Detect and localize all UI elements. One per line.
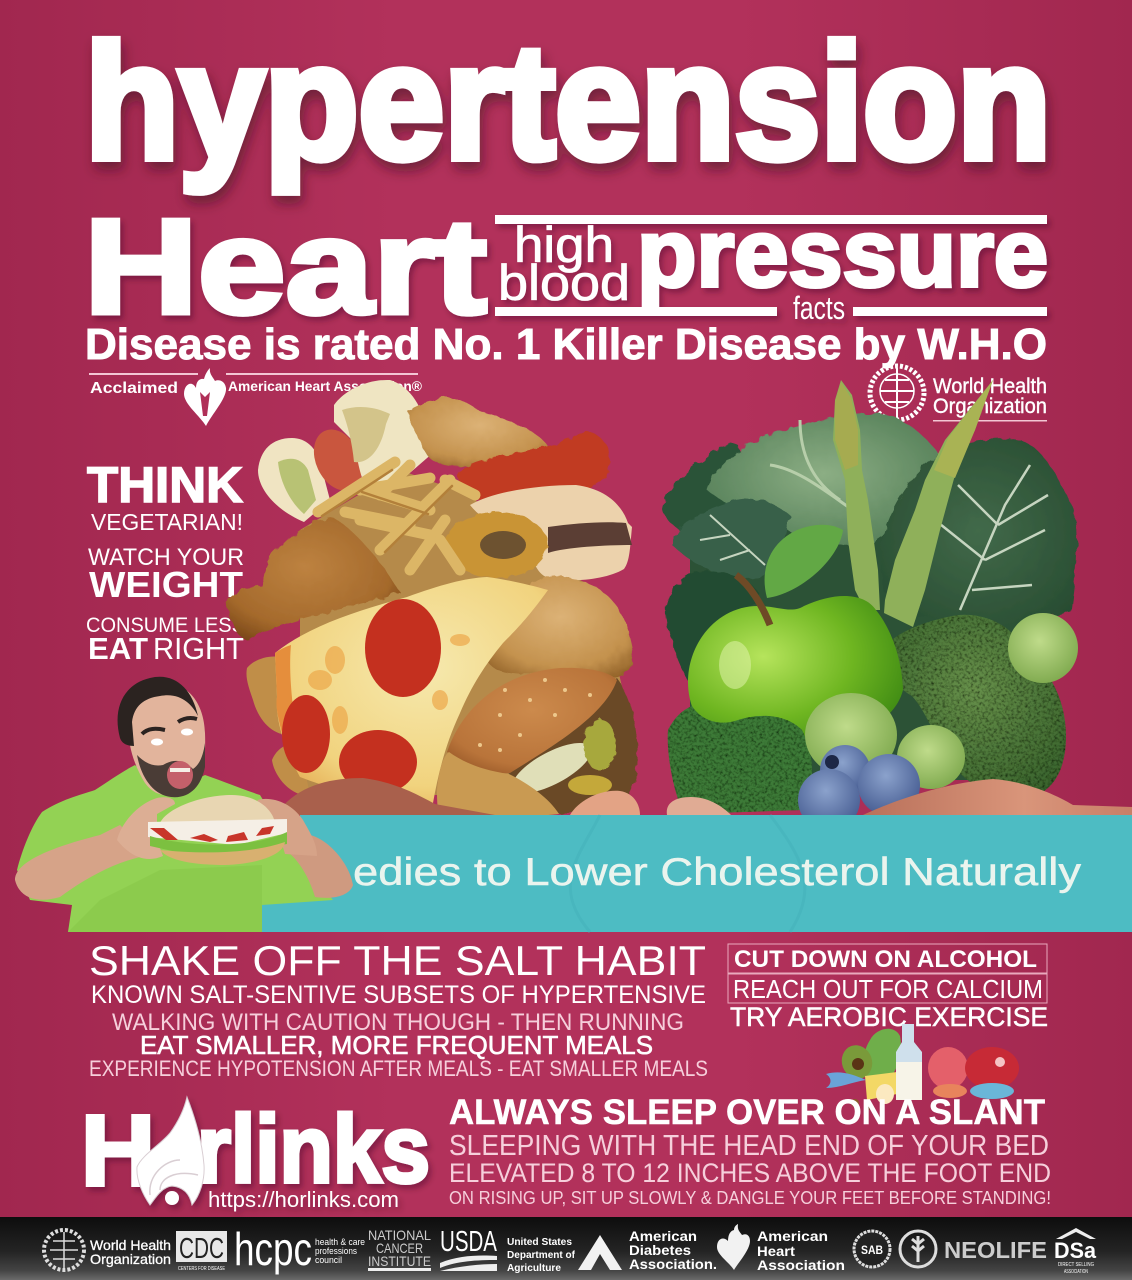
- footer logo: American Heart Association: American: [757, 1228, 828, 1244]
- red spicy chicken: [458, 432, 610, 500]
- dark leaf mid left: [667, 571, 759, 683]
- tips: alcohol, calcium, aerobic: [728, 944, 1048, 1032]
- broccoli: [882, 615, 1066, 799]
- fried chicken left: [228, 518, 400, 640]
- top burger: [470, 485, 632, 580]
- footer logo: NeoLife: NEOLIFE: [944, 1237, 1047, 1263]
- fries: [318, 462, 475, 570]
- logo: World Health Organization: [870, 366, 1047, 422]
- left tips text: WATCH YOUR: [88, 544, 244, 571]
- footer logo: National Cancer Institute: [368, 1227, 431, 1271]
- tips: alcohol, calcium, aerobic: REACH OUT FOR CALCIUM: [733, 974, 1043, 1004]
- banner: remedies to lower cholesterol: [262, 815, 1132, 932]
- subtitle: rated No. 1 killer: Disease is rated No. 1 Killer Disease by W.H.O: [85, 320, 1047, 369]
- illustration: vegetables pile: [663, 380, 1132, 831]
- footer logo: American Heart Association: [717, 1224, 845, 1273]
- onion rings: [446, 512, 548, 578]
- fried chicken right: [487, 575, 633, 678]
- footer logo: American Heart Association: Heart: [757, 1243, 795, 1259]
- lettuce and mustard: [506, 733, 598, 803]
- asparagus left: [833, 380, 880, 610]
- fried chicken top: [408, 397, 550, 467]
- footer logo: NeoLife: [900, 1231, 1047, 1267]
- large leaf: [765, 525, 843, 598]
- footer logo: American Diabetes Association: [578, 1228, 717, 1272]
- logo: Horlinks: [81, 1095, 430, 1212]
- icon: healthy food group: [826, 1024, 1019, 1110]
- hands under junk food: [283, 778, 495, 815]
- logo: World Health Organization: Organization: [933, 395, 1047, 418]
- logo: World Health Organization: World Health: [933, 375, 1047, 398]
- brows: [142, 718, 197, 734]
- eyes: [151, 728, 193, 746]
- left hand: [117, 797, 175, 859]
- left tips text: VEGETARIAN!: [91, 509, 243, 535]
- kale left: [672, 499, 790, 578]
- tips: salt habit text block: WALKING WITH CAUTION THOUGH - THEN RUNNING: [112, 1009, 684, 1036]
- asparagus right: [884, 380, 993, 627]
- footer logo: SAB: [854, 1231, 890, 1267]
- illustration: junk food pile: [228, 380, 640, 817]
- logo: American Heart Association acclaim: Acclaimed: [90, 380, 178, 397]
- footer logo: USDA: United States: [507, 1237, 572, 1248]
- footer logo: SAB: SAB: [861, 1243, 883, 1257]
- pizza cheese spots: [308, 634, 470, 734]
- footer logo: WHO: World Health: [90, 1237, 171, 1253]
- footer logo: National Cancer Institute: INSTITUTE: [368, 1253, 431, 1269]
- hair: [118, 677, 198, 746]
- apple stem: [736, 575, 770, 625]
- tips: salt habit text block: [89, 937, 708, 1081]
- footer logo: DSA: DIRECT SELLING: [1058, 1262, 1094, 1268]
- footer logo: American Heart Association: Association: [757, 1257, 845, 1273]
- tips: sleep on a slant: ALWAYS SLEEP OVER ON A SLANT: [449, 1093, 1045, 1132]
- left arm: [15, 825, 150, 900]
- footer logo: DSA: DSa: [1054, 1238, 1097, 1263]
- heading: Heart high blood pressure facts: facts: [793, 290, 845, 326]
- footer logo: American Diabetes Association: Association.: [629, 1256, 717, 1272]
- footer logo: USDA: [440, 1226, 576, 1274]
- footer logo: USDA: Agriculture: [507, 1263, 561, 1274]
- footer logo: DSA: ASSOCIATION: [1064, 1269, 1088, 1275]
- tips: alcohol, calcium, aerobic: CUT DOWN ON ALCOHOL: [734, 946, 1037, 973]
- tips: sleep on a slant: SLEEPING WITH THE HEAD END OF YOUR BED: [449, 1130, 1049, 1162]
- heading: Heart high blood pressure facts: Heart: [84, 191, 487, 342]
- tips: salt habit text block: KNOWN SALT-SENTIVE SUBSETS OF HYPERTENSIVE: [91, 981, 706, 1009]
- fried bits behind pizza: [246, 656, 310, 796]
- tips: salt habit text block: EAT SMALLER, MORE FREQUENT MEALS: [140, 1030, 653, 1060]
- sub sandwich top: [334, 380, 434, 484]
- title: hypertension: hypertension: [85, 10, 1051, 193]
- footer logo: DSA: [1054, 1228, 1097, 1275]
- vegetable base: [690, 520, 1050, 780]
- green apple: [688, 596, 903, 748]
- heading: Heart high blood pressure facts: high: [514, 217, 614, 273]
- footer logo: hcpc: professions: [315, 1246, 357, 1257]
- footer logo: WHO: Organization: [90, 1251, 171, 1267]
- cabbage: [707, 414, 941, 548]
- footer logo: American Diabetes Association: Diabetes: [629, 1242, 691, 1258]
- footer logo: American Diabetes Association: American: [629, 1228, 697, 1244]
- footer: partner logos: [0, 1217, 1132, 1280]
- pepperoni: [365, 599, 441, 697]
- bottom burger lower bun: [437, 752, 559, 817]
- tips: salt habit text block: EXPERIENCE HYPOTENSION AFTER MEALS - EAT SMALLER MEALS: [89, 1056, 708, 1081]
- left tips text: WEIGHT: [89, 564, 243, 605]
- bottom burger bun: [447, 668, 617, 773]
- left tips text: THINK: [87, 457, 243, 513]
- sandwich: [148, 795, 287, 865]
- heading: Heart high blood pressure facts: [84, 191, 1048, 342]
- footer logo: National Cancer Institute: CANCER: [376, 1240, 423, 1256]
- head: [128, 683, 205, 796]
- hands under vegetables: [667, 797, 731, 815]
- footer logo: USDA: USDA: [440, 1226, 497, 1258]
- hot dog sausage: [305, 422, 371, 498]
- dark leaf back left: [663, 444, 749, 536]
- footer logo: CDC: [176, 1231, 227, 1272]
- tips: salt habit text block: SHAKE OFF THE SALT HABIT: [89, 937, 706, 984]
- tips: alcohol, calcium, aerobic: TRY AEROBIC EXERCISE: [730, 1002, 1048, 1032]
- heading: Heart high blood pressure facts: blood: [498, 255, 630, 311]
- logo: American Heart Association acclaim: American Heart Association®: [228, 379, 422, 394]
- pizza slice: [275, 577, 548, 803]
- footer logo: WHO: [44, 1230, 171, 1270]
- logo: Horlinks: rlinks: [197, 1096, 430, 1203]
- logo: American Heart Association acclaim: [89, 368, 422, 426]
- left tips text: RIGHT: [153, 631, 244, 666]
- footer logo: USDA: Department of: [507, 1250, 576, 1261]
- beard: [137, 743, 205, 797]
- footer logo: CDC: CDC: [179, 1233, 224, 1265]
- left tips text: EAT: [88, 631, 148, 666]
- hot dog bun left: [258, 438, 330, 522]
- footer logo: hcpc: hcpc: [234, 1223, 312, 1275]
- illustration: man eating sandwich: [15, 677, 353, 932]
- footer logo: CDC: CENTERS FOR DISEASE: [178, 1266, 226, 1272]
- left tips text: CONSUME LESS: [86, 614, 245, 637]
- footer logo: National Cancer Institute: NATIONAL: [368, 1227, 431, 1243]
- footer logo: hcpc: council: [315, 1255, 342, 1266]
- logo: Horlinks: https://horlinks.com: [208, 1187, 399, 1212]
- shirt: [17, 765, 333, 932]
- right hand: [257, 799, 317, 856]
- logo: Horlinks: H: [81, 1095, 155, 1207]
- brussels sprouts: [805, 693, 897, 777]
- bottom burger filling: [505, 678, 638, 814]
- tips: sleep on a slant: ON RISING UP, SIT UP SLOWLY & DANGLE YOUR FEET BEFORE STANDING!: [449, 1188, 1051, 1208]
- pile base: [300, 470, 625, 795]
- sprout right: [1008, 613, 1078, 683]
- blueberries: [820, 745, 870, 795]
- open mouth: [167, 761, 193, 789]
- kale bottom: [668, 706, 812, 814]
- tips: sleep on a slant: ELEVATED 8 TO 12 INCHES ABOVE THE FOOT END: [449, 1158, 1051, 1188]
- collard right: [881, 439, 1077, 624]
- heading: Heart high blood pressure facts: pressure: [637, 200, 1048, 307]
- right arm: [285, 835, 353, 898]
- tips: sleep on a slant: [449, 1093, 1051, 1208]
- left tips text: [86, 457, 245, 666]
- banner: remedies to lower cholesterol: edies to Lower Cholesterol Naturally: [353, 851, 1082, 894]
- footer logo: hcpc: health & care: [315, 1237, 365, 1248]
